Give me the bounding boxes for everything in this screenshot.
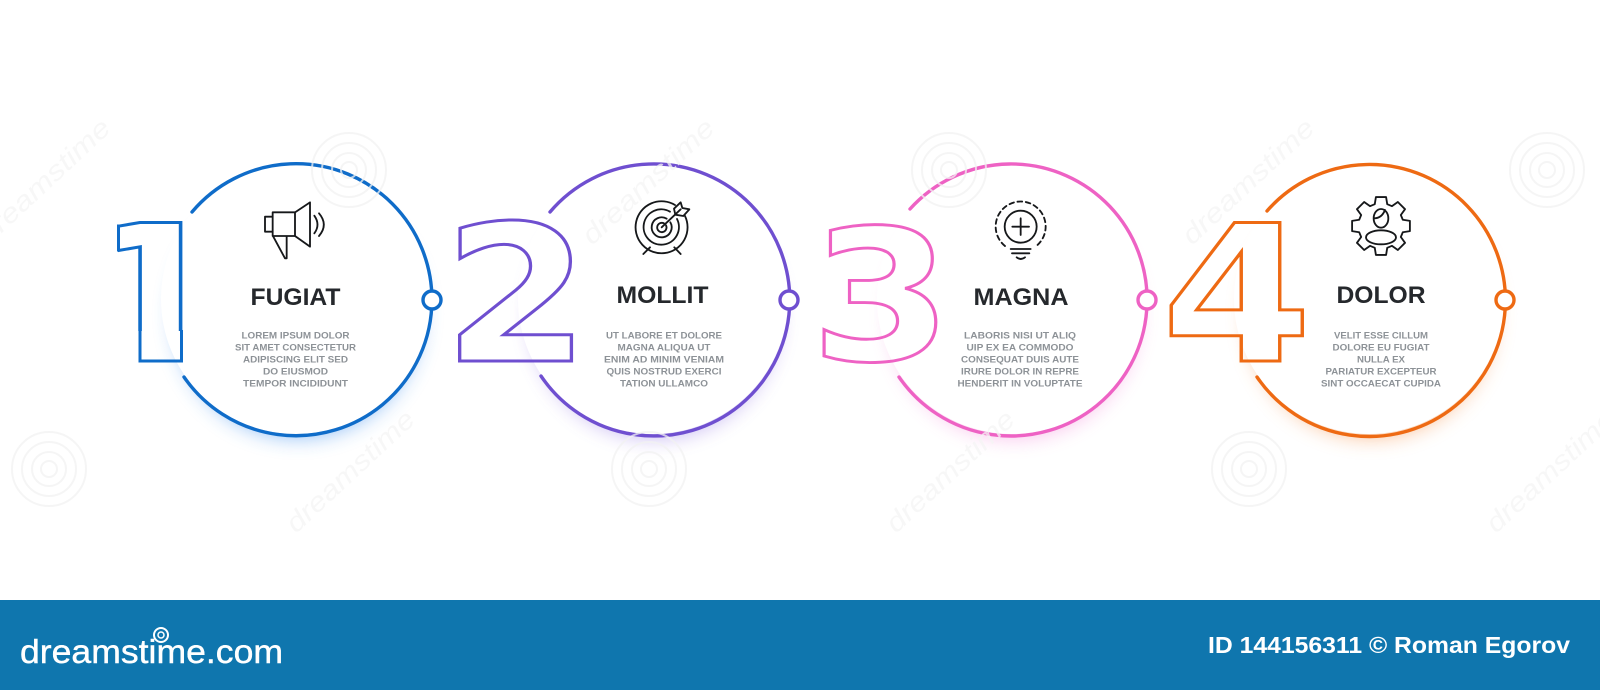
body text: step 2: QUIS NOSTRUD EXERCI <box>606 367 722 378</box>
body text: step 1: ADIPISCING ELIT SED <box>243 355 348 366</box>
body text: step 1: LOREM IPSUM DOLOR <box>242 331 350 342</box>
body text: step 4: SINT OCCAECAT CUPIDA <box>1321 379 1441 390</box>
icon: light bulb with plus <box>996 202 1046 259</box>
watermark layer: dreamstime <box>576 113 720 250</box>
heading: FUGIAT: FUGIAT <box>250 284 341 311</box>
connector dot: step 4 <box>1496 291 1514 309</box>
number 1 <box>117 221 183 362</box>
body text: step 4: DOLORE EU FUGIAT <box>1332 343 1430 354</box>
body text: step 3: CONSEQUAT DUIS AUTE <box>961 355 1080 366</box>
footer credit: ID 144156311 © Roman Egorov <box>1208 632 1570 658</box>
connector dot: step 2 <box>780 291 798 309</box>
number 4: 4 <box>1162 186 1312 407</box>
heading: MOLLIT: MOLLIT <box>616 282 709 309</box>
circle ring: step 3 <box>899 164 1147 436</box>
body text: step 2: ENIM AD MINIM VENIAM <box>604 355 724 366</box>
panel: step 2 <box>443 164 798 438</box>
body text: step 4: PARIATUR EXCEPTEUR <box>1326 367 1437 378</box>
watermark layer: dreamstime <box>1480 404 1600 538</box>
connector dot: step 1 <box>423 291 441 309</box>
heading: DOLOR: DOLOR <box>1336 282 1426 309</box>
body text: step 3: HENDERIT IN VOLUPTATE <box>958 379 1083 390</box>
body text: step 2 <box>604 331 724 390</box>
watermark layer: dreamstime <box>880 404 1021 538</box>
heading: MAGNA: MAGNA <box>974 284 1068 311</box>
footer logo: dreamstime.com: dreamstime.com <box>20 633 283 670</box>
body text: step 2: MAGNA ALIQUA UT <box>618 343 711 354</box>
icon: person in gear <box>1352 197 1410 255</box>
body text: step 4: NULLA EX <box>1357 355 1406 366</box>
circle ring: step 4 <box>1257 164 1505 436</box>
panel: step 3 <box>810 164 1156 438</box>
watermark layer: dreamstime <box>1176 113 1320 250</box>
panel: step 4 <box>1162 164 1514 438</box>
body text: step 2: UT LABORE ET DOLORE <box>606 331 723 342</box>
panel: step 1 <box>76 164 441 438</box>
icon: megaphone <box>265 202 324 258</box>
footer bar <box>0 600 1600 690</box>
watermark layer: dreamstime <box>280 404 421 538</box>
body text: step 3 <box>958 331 1083 390</box>
circle ring: step 2 <box>541 164 790 436</box>
number 3: 3 <box>810 191 952 403</box>
watermark layer <box>0 113 1600 538</box>
body text: step 1: DO EIUSMOD <box>263 367 328 378</box>
body text: step 4: VELIT ESSE CILLUM <box>1334 331 1428 342</box>
body text: step 1 <box>235 331 356 390</box>
body text: step 2: TATION ULLAMCO <box>620 379 709 390</box>
number 2: 2 <box>443 186 590 406</box>
body text: step 3: LABORIS NISI UT ALIQ <box>964 331 1077 342</box>
body text: step 4 <box>1321 331 1441 390</box>
connector dot: step 3 <box>1138 291 1156 309</box>
body text: step 3: UIP EX EA COMMODO <box>966 343 1074 354</box>
icon: target with arrow <box>636 201 689 254</box>
body text: step 1: SIT AMET CONSECTETUR <box>235 343 356 354</box>
number 1: 1 <box>76 185 234 406</box>
body text: step 3: IRURE DOLOR IN REPRE <box>961 367 1080 378</box>
body text: step 1: TEMPOR INCIDIDUNT <box>243 379 348 390</box>
circle ring: step 1 <box>184 164 432 436</box>
